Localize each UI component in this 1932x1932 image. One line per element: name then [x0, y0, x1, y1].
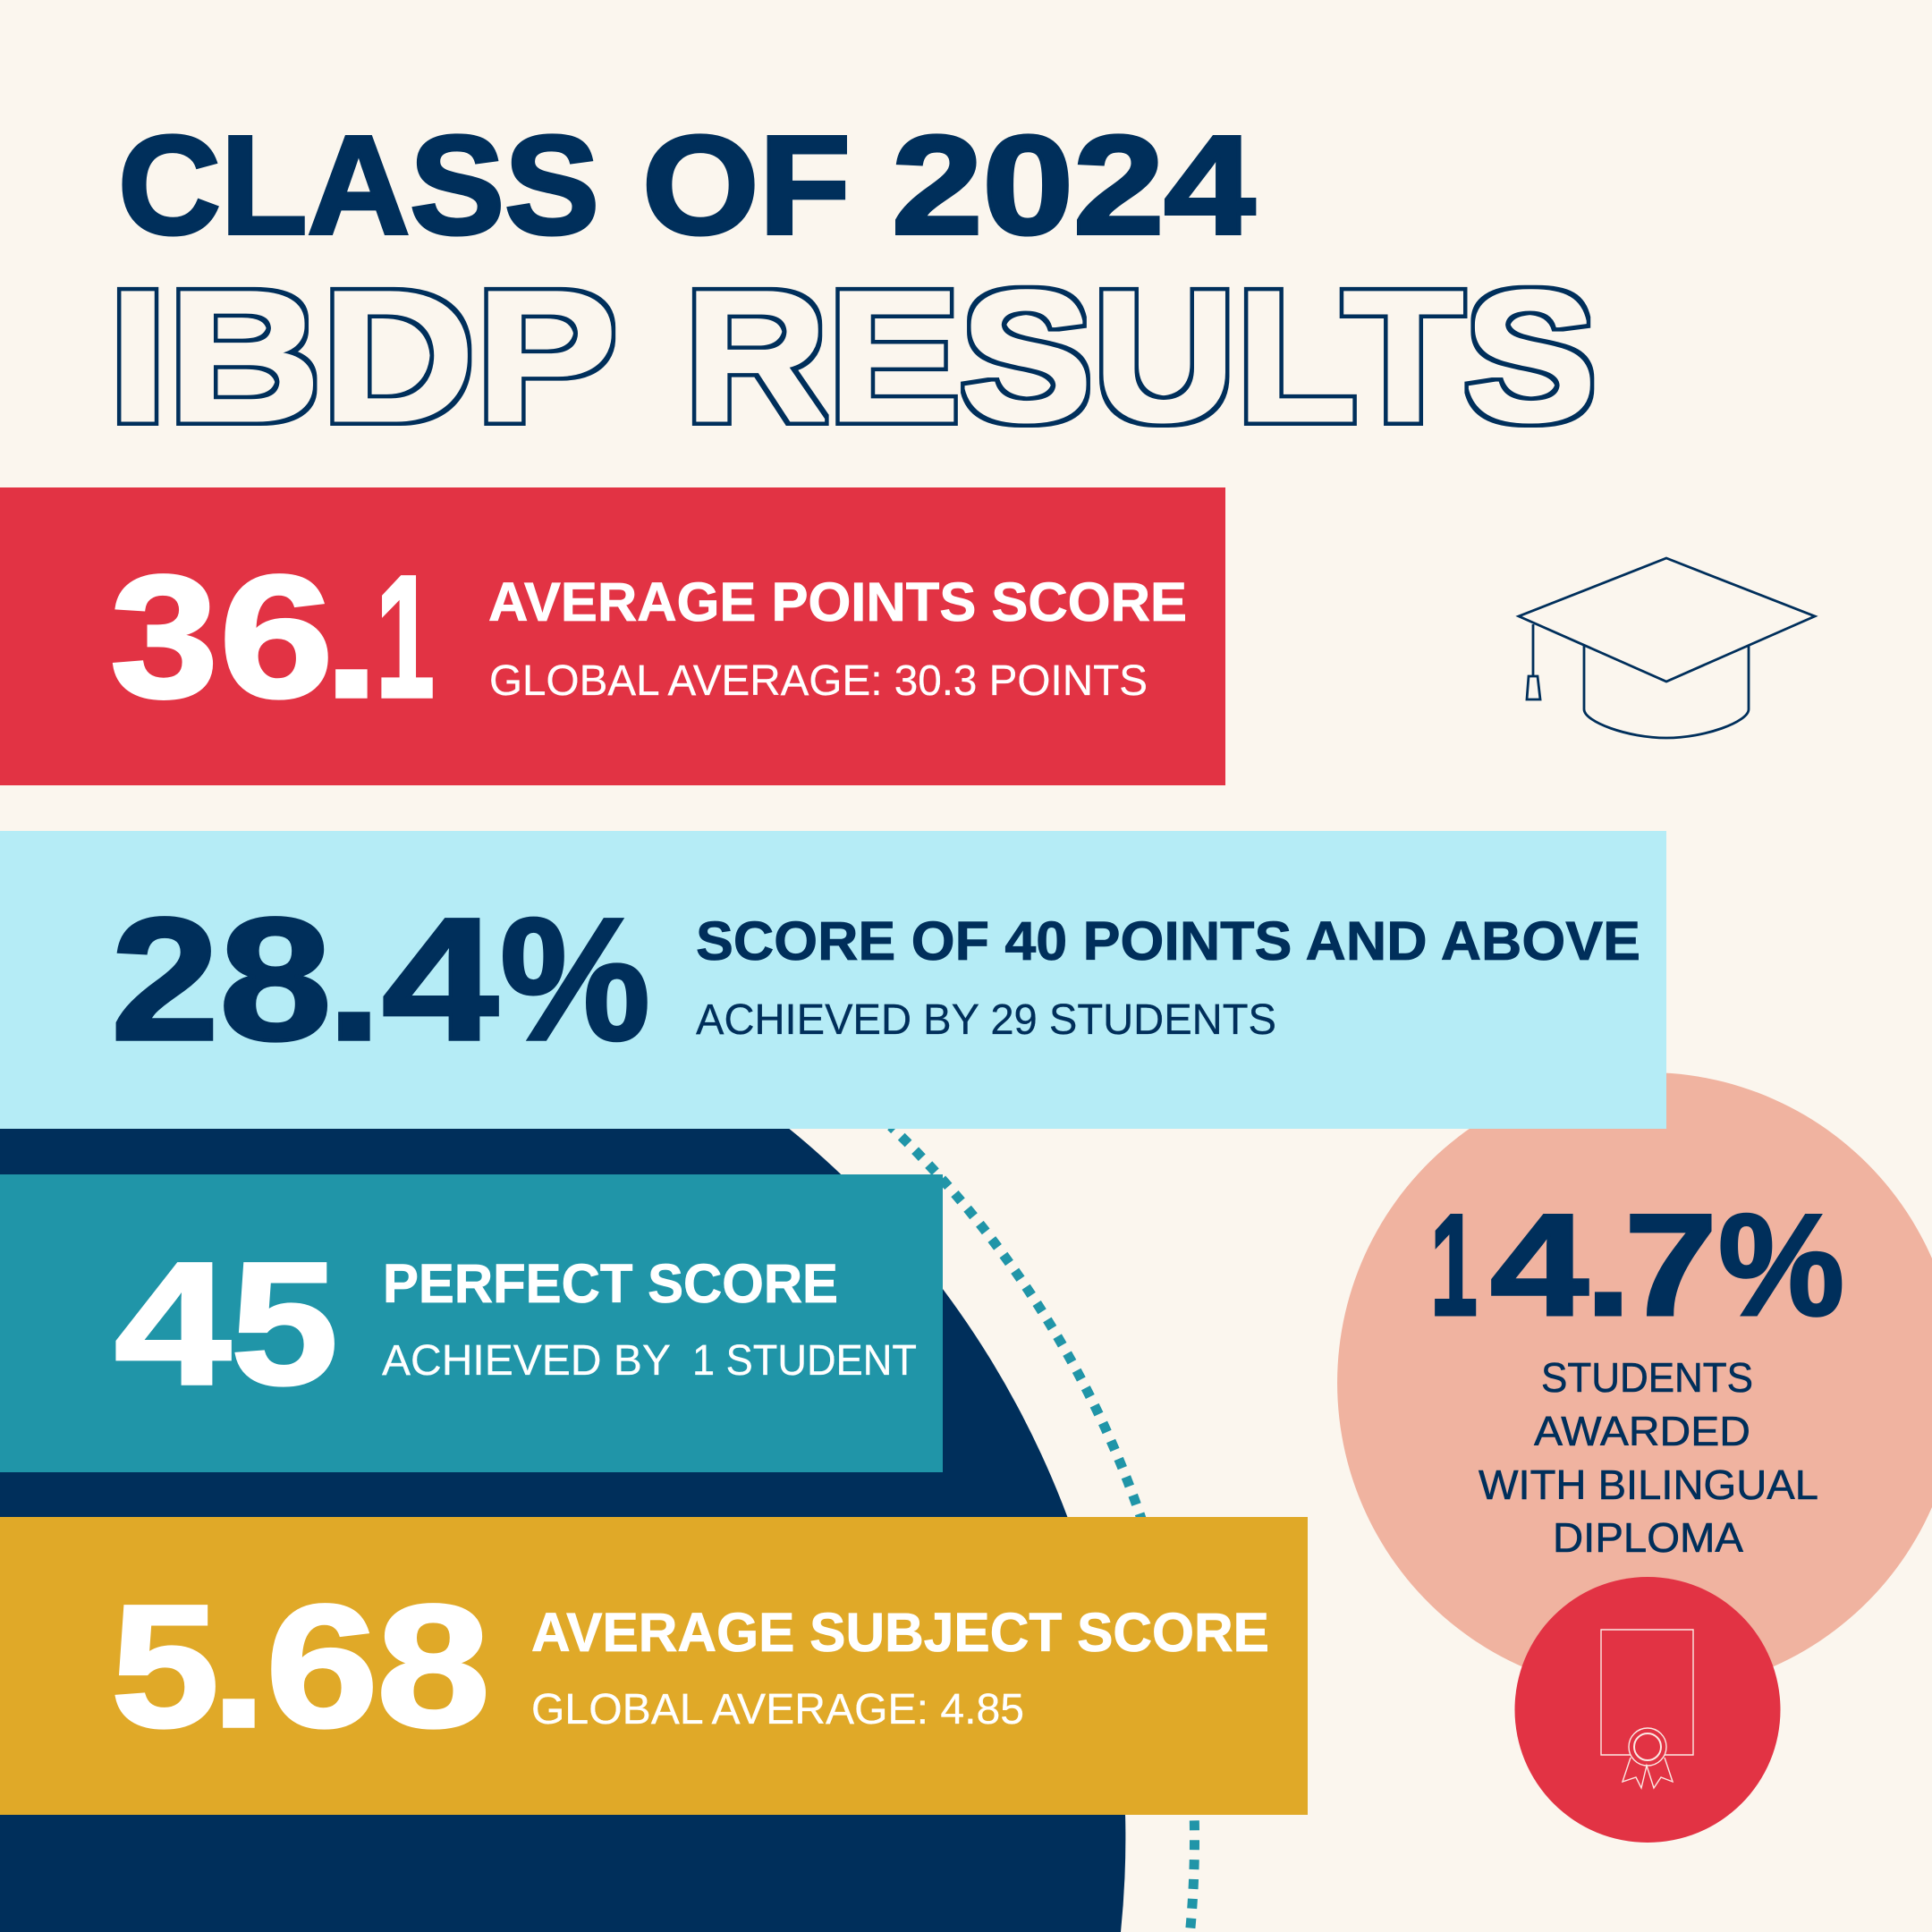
number: 36.1: 6	[219, 539, 334, 734]
dark navy background circle	[0, 922, 1125, 1932]
number: 14.7%: 4	[1490, 1184, 1589, 1346]
label: perfect score: PERFECT SCORE	[383, 1253, 838, 1314]
heading: class of 2024: CLASS	[118, 107, 599, 264]
text block: students awarded with bilingual diploma	[1479, 1354, 1818, 1561]
sub-label: global average 30.3: GLOBAL AVERAGE: 30.3 POINTS	[489, 657, 1148, 705]
number: 14.7%: %	[1718, 1184, 1844, 1346]
circle: bilingual diploma background	[1337, 1072, 1932, 1693]
number: 14.7%: 7	[1624, 1184, 1717, 1346]
sub-label: achieved by 1 student: 1 STUDENT	[692, 1337, 917, 1385]
title	[108, 107, 1597, 461]
number: 28.4%: 8	[219, 882, 332, 1077]
number: 28.4%: 4	[382, 882, 498, 1077]
panel: average subject score	[0, 1517, 1308, 1815]
number: 5.68: 5	[111, 1569, 219, 1764]
text block: students awarded with bilingual diploma: STUDENTS	[1541, 1354, 1753, 1401]
sub-label: global average 4.85: GLOBAL AVERAGE: 4.85	[531, 1686, 1024, 1733]
label: average subject score: AVERAGE SUBJECT SCORE	[531, 1602, 1269, 1663]
text block: students awarded with bilingual diploma: AWARDED	[1534, 1408, 1750, 1454]
text block: students awarded with bilingual diploma: WITH BILINGUAL	[1479, 1462, 1818, 1508]
number: 14.7%: 1	[1430, 1184, 1478, 1346]
number: 5.68: .	[211, 1569, 267, 1764]
text block: students awarded with bilingual diploma: DIPLOMA	[1553, 1514, 1743, 1561]
number: 45: 5	[231, 1226, 338, 1421]
label: average points score: AVERAGE POINTS SCORE	[488, 572, 1187, 632]
number: 14.7%: .	[1585, 1184, 1631, 1346]
number: 28.4%: 2	[111, 882, 219, 1077]
heading: IBDP results outlined: IBDP	[108, 253, 614, 461]
icon: graduation cap	[1519, 558, 1815, 738]
heading: class of 2024: 2024	[892, 107, 1255, 264]
callout: bilingual diploma stat	[1430, 1184, 1844, 1561]
panel: score of 40 points and above	[0, 831, 1666, 1129]
number: 36.1: 1	[376, 539, 435, 734]
icon: diploma badge	[1515, 1577, 1780, 1843]
number: 28.4%: .	[326, 882, 382, 1077]
heading: class of 2024: OF	[642, 107, 851, 264]
sub-label: achieved by 29 students: ACHIEVED BY 29 STUDENTS	[696, 996, 1276, 1044]
number: 36.1: 3	[110, 539, 218, 734]
sub-label: achieved by 1 student: ACHIEVED BY	[382, 1337, 670, 1385]
heading: IBDP results outlined: RESULTS	[684, 253, 1597, 461]
number: 5.68: 8	[377, 1569, 490, 1764]
label: score of 40 points and above: SCORE OF 40 POINTS AND ABOVE	[696, 911, 1640, 971]
icon: certificate with ribbon	[1601, 1630, 1693, 1788]
number: 28.4%: %	[500, 882, 650, 1077]
panel: perfect score	[0, 1174, 943, 1472]
number: 36.1: .	[324, 539, 379, 734]
number: 45: 4	[114, 1226, 231, 1421]
dotted teal arc	[891, 1126, 1195, 1931]
panel: average points score	[0, 487, 1225, 785]
number: 5.68: 6	[266, 1569, 378, 1764]
